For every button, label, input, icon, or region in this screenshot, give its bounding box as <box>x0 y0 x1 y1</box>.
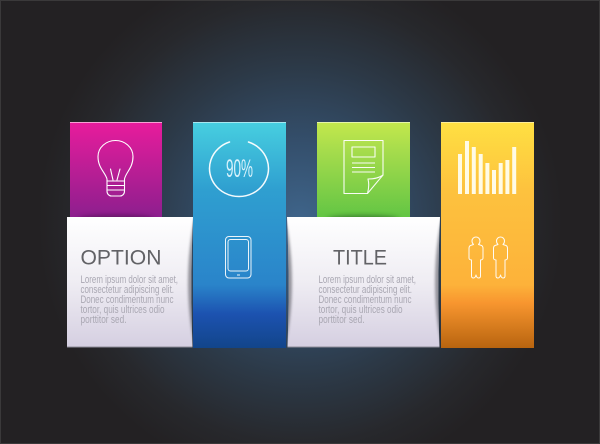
card edge shadows <box>286 220 441 344</box>
icon: bar chart <box>458 141 516 194</box>
panel: option card <box>67 217 194 348</box>
panel: green tab <box>317 122 410 223</box>
panel: title card <box>286 217 441 348</box>
text block: title body: Donec condimentum nunc <box>318 294 412 306</box>
icon: 90% ring <box>210 142 268 197</box>
icon: smartphone <box>226 236 251 278</box>
text block: option body: Lorem ipsum dolor sit amet, <box>80 274 178 286</box>
heading: title: TITLE <box>333 246 387 270</box>
panel: orange column <box>441 122 534 348</box>
tab shadow <box>327 212 399 217</box>
text block: option body: porttitor sed. <box>80 314 126 326</box>
icon: 90% ring: 90% <box>226 155 253 183</box>
panel: blue column <box>193 122 286 348</box>
text block: option body: Donec condimentum nunc <box>80 294 174 306</box>
icon: document <box>344 140 383 194</box>
heading: option: OPTION <box>80 246 162 270</box>
text block: option body: consectetur adipiscing elit. <box>80 284 174 296</box>
text block: title body: consectetur adipiscing elit. <box>318 284 412 296</box>
card edge shadow <box>188 220 194 344</box>
text block: option body: tortor, quis ultrices odio <box>80 304 165 316</box>
text block: option body <box>80 274 178 326</box>
text block: title body <box>318 274 416 326</box>
panel: magenta tab <box>70 122 162 223</box>
text block: title body: tortor, quis ultrices odio <box>318 304 403 316</box>
text block: title body: porttitor sed. <box>318 314 364 326</box>
icon: light bulb <box>98 140 133 196</box>
icon: two people <box>469 237 508 278</box>
text block: title body: Lorem ipsum dolor sit amet, <box>318 274 416 286</box>
tab shadow <box>80 213 152 217</box>
